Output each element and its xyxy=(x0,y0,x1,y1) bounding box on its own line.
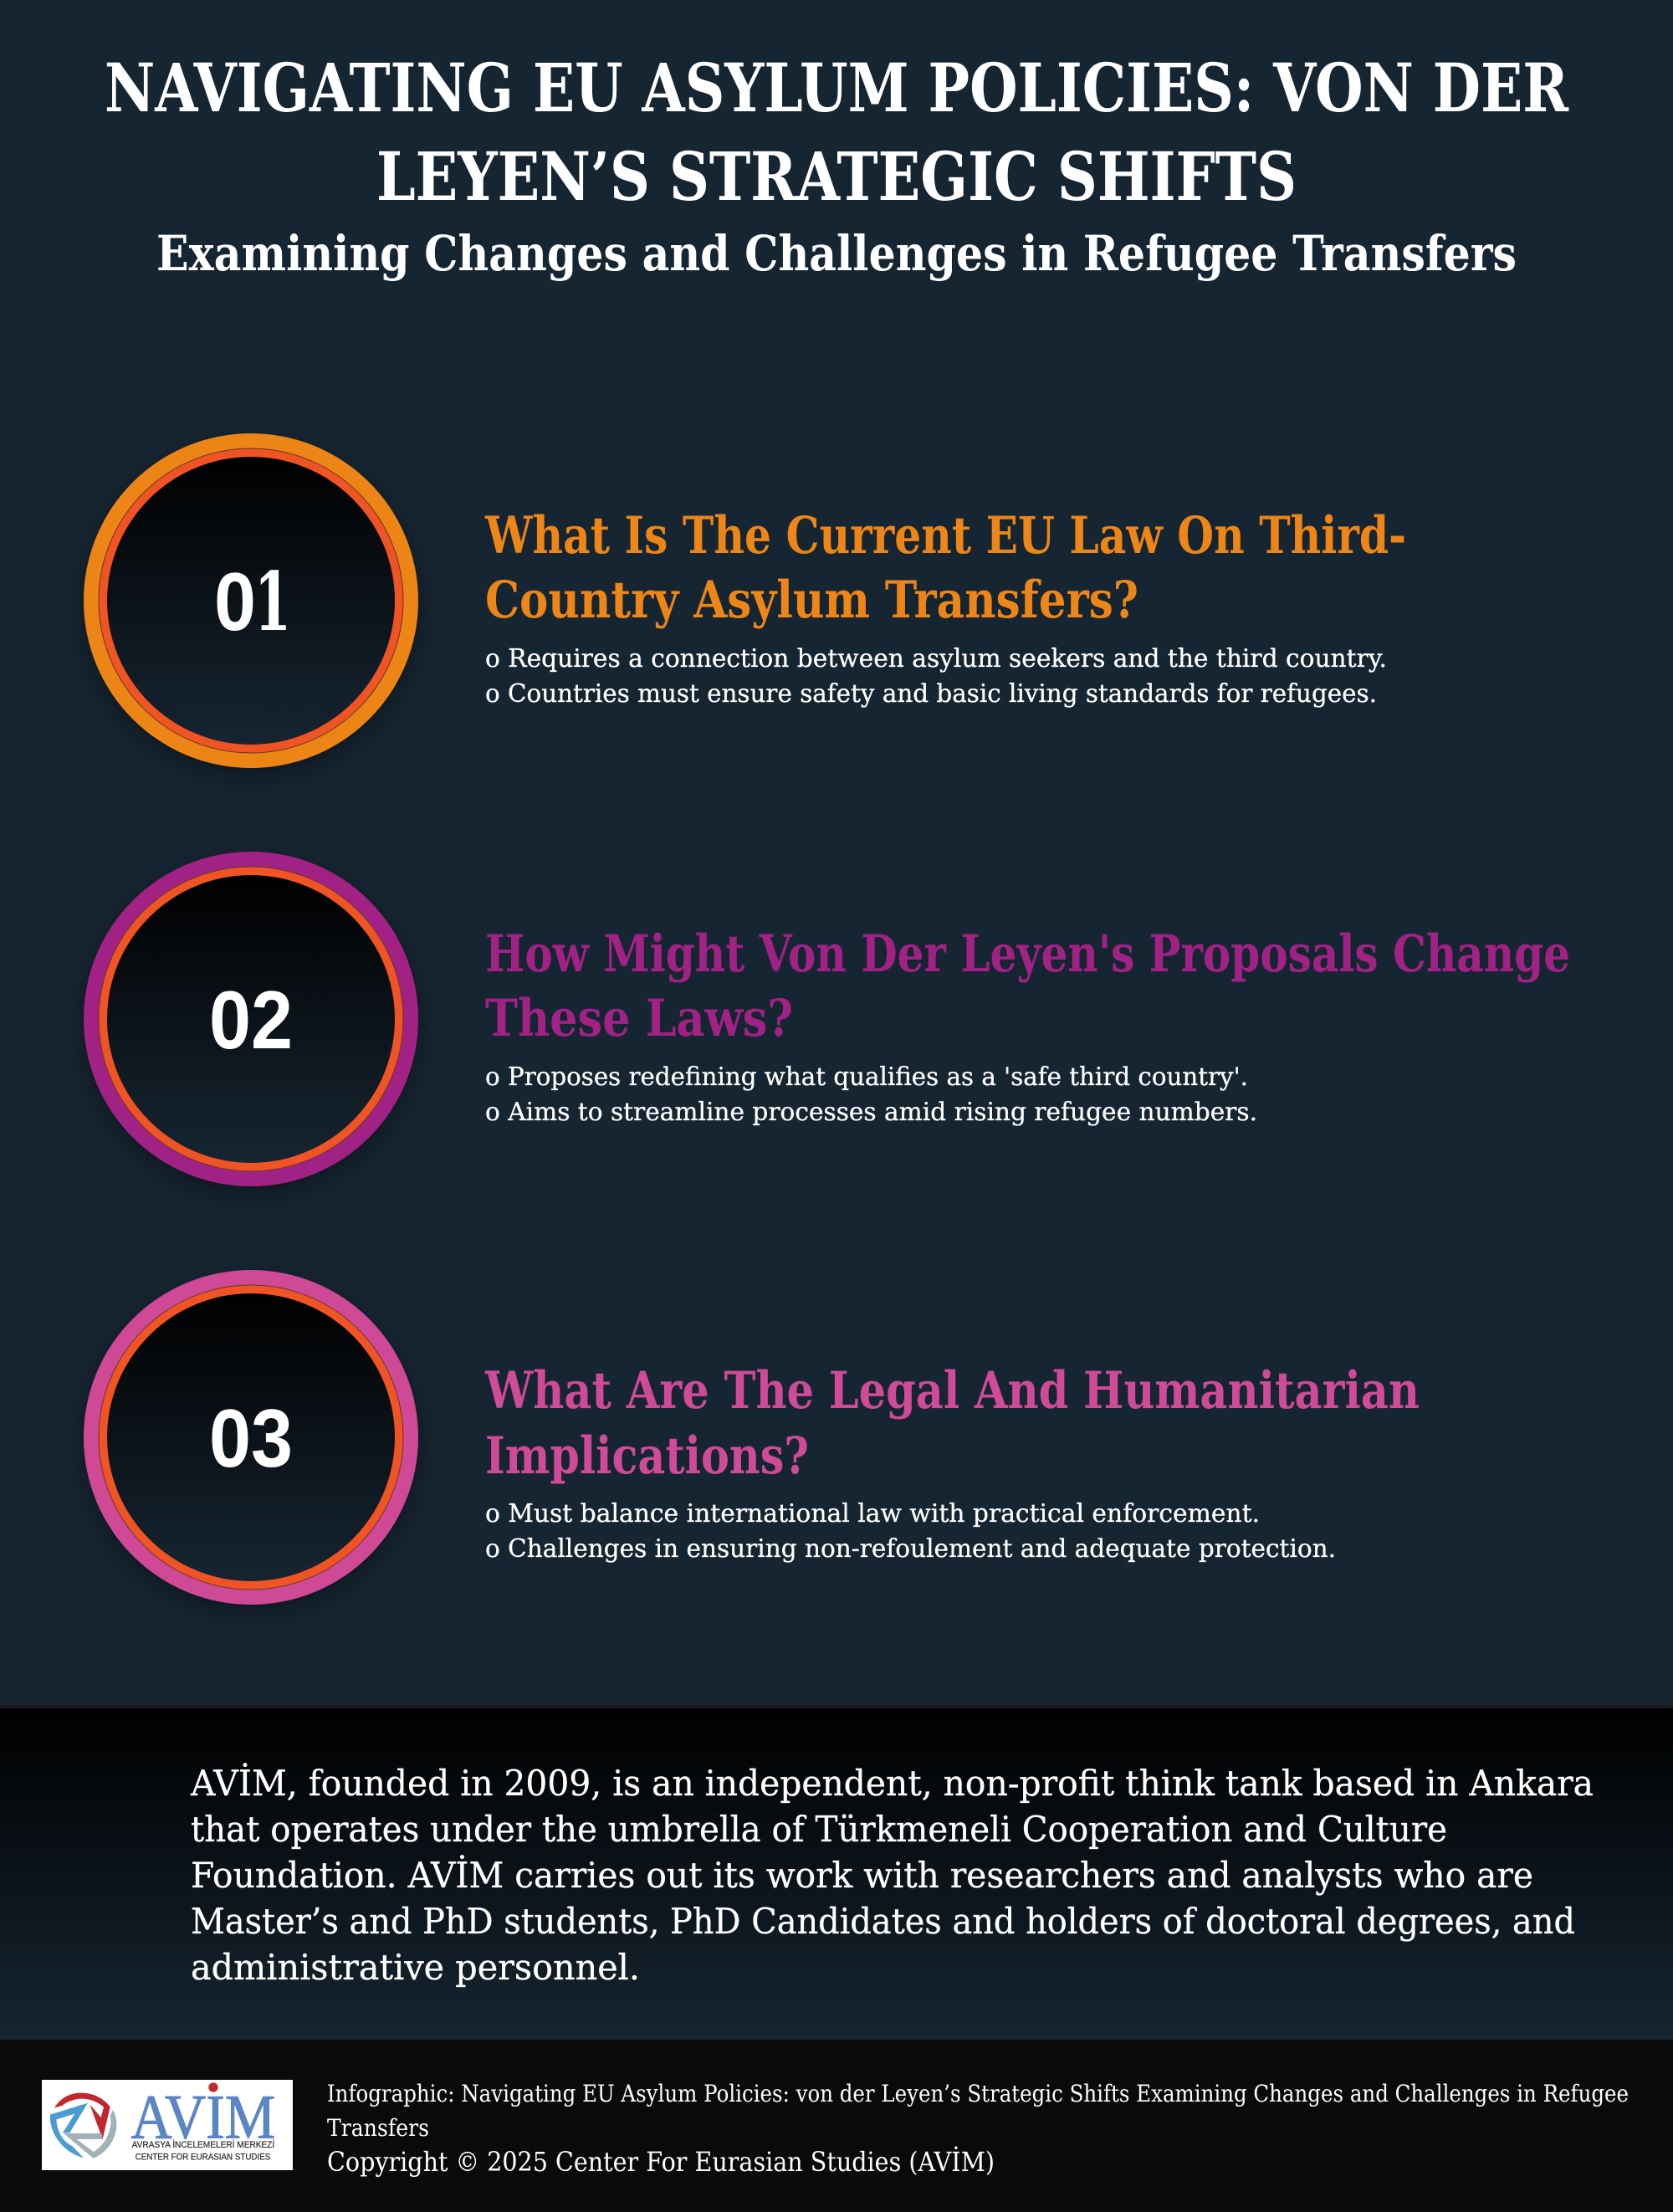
about text: that operates under the umbrella of Türkmeneli Cooperation and Culture xyxy=(191,1809,1447,1850)
bullet list 03 xyxy=(485,1499,1336,1564)
bullet list 02 xyxy=(485,1062,1257,1127)
heading 03 xyxy=(484,1361,1420,1486)
title: LEYEN’S STRATEGIC SHIFTS xyxy=(376,137,1297,216)
number badge 01: 1 xyxy=(254,555,291,649)
title xyxy=(105,49,1568,216)
panel: section 01 xyxy=(84,433,1406,768)
number badge 01 xyxy=(84,433,418,768)
heading 02: These Laws? xyxy=(485,989,793,1048)
logo: AVİM: AVRASYA İNCELEMELERİ MERKEZİ xyxy=(132,2139,274,2150)
logo: AVİM: AVIM xyxy=(131,2082,275,2152)
heading 01 xyxy=(484,506,1406,630)
bullet list 02: o Aims to streamline processes amid rising refugee numbers. xyxy=(485,1098,1257,1127)
heading 03: Implications? xyxy=(485,1426,809,1486)
number badge 01: 0 xyxy=(214,556,256,648)
panel: section 03 xyxy=(84,1270,1420,1605)
bullet list 01 xyxy=(485,644,1387,709)
bullet list 03: o Challenges in ensuring non-refoulement and adequate protection. xyxy=(485,1534,1336,1564)
subtitle: Examining Changes and Challenges in Refugee Transfers xyxy=(156,225,1517,282)
logo: AVİM: CENTER FOR EURASIAN STUDIES xyxy=(136,2152,270,2162)
footer credit text xyxy=(327,2080,1629,2178)
panel: footer xyxy=(0,2040,1673,2212)
number badge 03: 03 xyxy=(209,1392,293,1484)
bullet list 01: o Countries must ensure safety and basic living standards for refugees. xyxy=(485,679,1377,709)
about text: Master’s and PhD students, PhD Candidates and holders of doctoral degrees, and xyxy=(191,1901,1575,1942)
heading 02 xyxy=(485,924,1570,1048)
number badge 02 xyxy=(84,852,418,1186)
bullet list 01: o Requires a connection between asylum seekers and the third country. xyxy=(485,644,1387,673)
number badge 03 xyxy=(84,1270,418,1605)
panel: about AVİM xyxy=(0,1705,1673,2040)
header xyxy=(105,49,1568,282)
number badge 02: 02 xyxy=(209,974,293,1066)
about text: AVİM, founded in 2009, is an independent, non-profit think tank based in Ankara xyxy=(190,1762,1594,1804)
about text: Foundation. AVİM carries out its work with researchers and analysts who are xyxy=(191,1854,1533,1896)
heading 03: What Are The Legal And Humanitarian xyxy=(484,1361,1420,1421)
about text xyxy=(190,1762,1594,1988)
heading 01: Country Asylum Transfers? xyxy=(485,571,1138,630)
panel: section 02 xyxy=(84,852,1570,1186)
about text: administrative personnel. xyxy=(191,1947,640,1988)
heading 01: What Is The Current EU Law On Third- xyxy=(484,506,1406,566)
footer credit text: Copyright © 2025 Center For Eurasian Studies (AVİM) xyxy=(327,2146,995,2178)
footer credit text: Transfers xyxy=(327,2114,429,2142)
bullet list 03: o Must balance international law with practical enforcement. xyxy=(485,1499,1260,1528)
logo: AVİM xyxy=(42,2080,293,2170)
bullet list 02: o Proposes redefining what qualifies as a 'safe third country'. xyxy=(485,1062,1248,1092)
